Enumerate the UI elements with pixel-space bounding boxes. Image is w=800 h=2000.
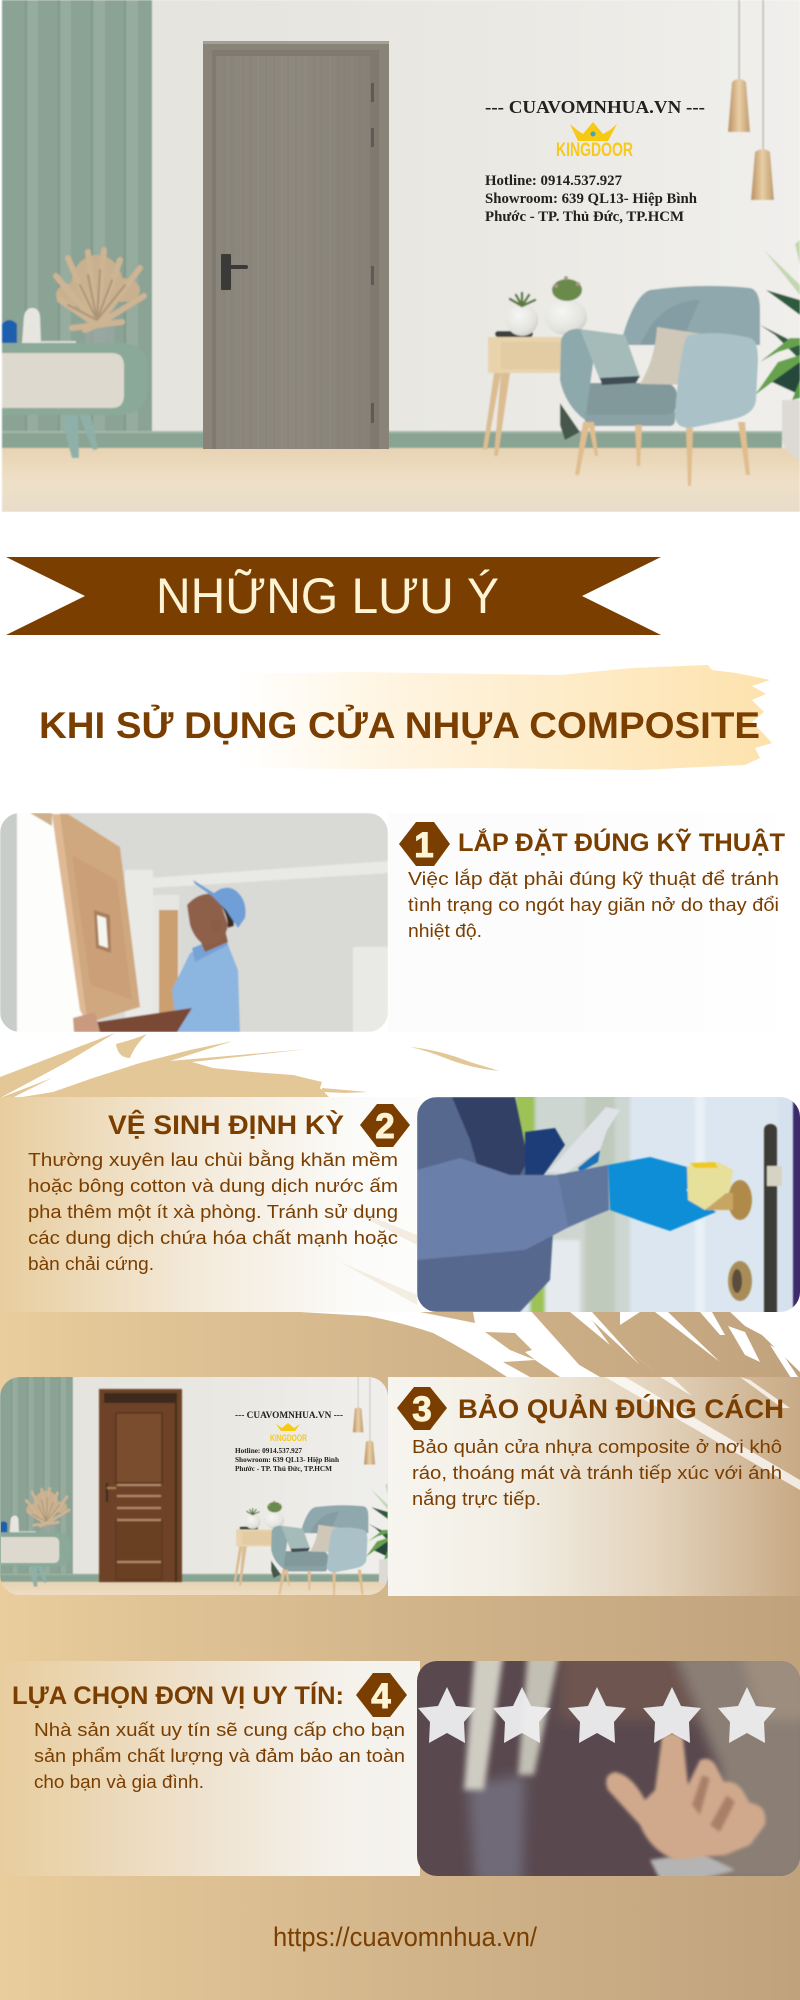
tan background lower page [0,1312,800,2000]
brush highlight [237,665,772,770]
panel: step 1 [0,813,800,1032]
text block 3: Bảo quản cửa nhựa composite ở nơi khô [412,1436,782,1457]
hand [606,1733,765,1860]
badge 4: 4 [371,1677,391,1716]
photo: hand choosing stars [417,1650,800,1885]
brand text block: Phước - TP. Thủ Đức, TP.HCM [485,209,684,225]
door: brown [99,1389,182,1582]
logo: Kingdoor crown [556,122,633,161]
chair [560,403,580,440]
text block 4: cho bạn và gia đình. [34,1771,204,1792]
title banner: NHỮNG LƯU Ý [156,568,499,624]
badge 2: 2 [375,1107,395,1146]
brand text block: Hotline: 0914.537.927 [485,173,622,189]
heading 3: BẢO QUẢN ĐÚNG CÁCH [458,1392,784,1424]
stars rating [418,1687,776,1743]
text block 4 [34,1719,405,1792]
text block 2: bàn chải cứng. [28,1253,154,1274]
brand text block [485,97,705,225]
door: gray composite [203,41,389,449]
footer url: https://cuavomnhua.vn/ [273,1922,537,1952]
text block 4: sản phẩm chất lượng và đảm bảo an toàn [34,1745,405,1766]
brand text block: Showroom: 639 QL13- Hiệp Bình [485,191,698,207]
white brush swoosh between steps 2 and 3 [280,1310,800,1392]
brand text mini: Showroom: 639 QL13- Hiệp Bình [235,1456,339,1464]
brand text mini: --- CUAVOMNHUA.VN --- [235,1410,343,1420]
brand text mini: Hotline: 0914.537.927 [235,1447,303,1455]
panel: hero room photo [2,0,800,512]
text block 3: nắng trực tiếp. [412,1488,541,1509]
badge 1 [399,822,450,866]
plant right [782,400,800,460]
door handle [221,254,248,290]
text block 2: Thường xuyên lau chùi bằng khăn mềm [28,1149,398,1170]
sideboard [60,412,98,458]
text block 3: ráo, thoáng mát và tránh tiếp xúc với ánh [412,1462,782,1483]
badge 1: 1 [414,826,434,865]
title banner [6,557,661,635]
brand text mini: Phước - TP. Thủ Đức, TP.HCM [235,1465,332,1473]
subtitle with brush stroke [39,665,772,770]
panel: step 4 [14,1661,800,1876]
heading 2: VỆ SINH ĐỊNH KỲ [108,1109,344,1140]
brand text block: --- CUAVOMNHUA.VN --- [485,97,705,117]
badge 3: 3 [412,1390,432,1429]
faint brush on panel [330,1200,417,1305]
badge 3 [397,1387,447,1430]
photo: cleaning door handle [410,1090,800,1320]
brush strokes above step 2 [0,1033,499,1099]
pendant lamps [738,0,740,80]
brand text mini [235,1410,343,1473]
badge 2 [360,1104,410,1147]
text block 1 [408,868,779,941]
text block 1: Việc lắp đặt phải đúng kỹ thuật để tránh [408,868,779,889]
text block 3 [412,1436,782,1509]
text block 2: các dung dịch chứa hóa chất mạnh hoặc [28,1227,398,1248]
heading 1: LẮP ĐẶT ĐÚNG KỸ THUẬT [458,827,785,857]
photo: brown door room [0,1370,388,1612]
text block 2: pha thêm một ít xà phòng. Tránh sử dụng [28,1201,398,1222]
panel: step 3 [0,1370,800,1612]
subtitle with brush stroke: KHI SỬ DỤNG CỬA NHỰA COMPOSITE [39,704,760,746]
badge 4 [356,1673,407,1717]
text block 2 [28,1149,398,1274]
text block 4: Nhà sản xuất uy tín sẽ cung cấp cho bạn [34,1719,405,1740]
brand text mini: KINGDOOR [270,1433,307,1443]
side table [483,373,510,456]
photo: installing door [0,813,388,1032]
logo: Kingdoor crown: KINGDOOR [556,140,633,161]
text block 1: nhiệt độ. [408,920,482,941]
text block 2: hoặc bông cotton và dung dịch nước ấm [28,1175,398,1196]
text block 1: tình trạng co ngót hay giãn nở do thay đổi [408,894,779,915]
white brush streaks over step 3 [605,1377,800,1490]
panel: step 2 [0,1090,800,1320]
heading 4: LỰA CHỌN ĐƠN VỊ UY TÍN: [12,1681,344,1710]
